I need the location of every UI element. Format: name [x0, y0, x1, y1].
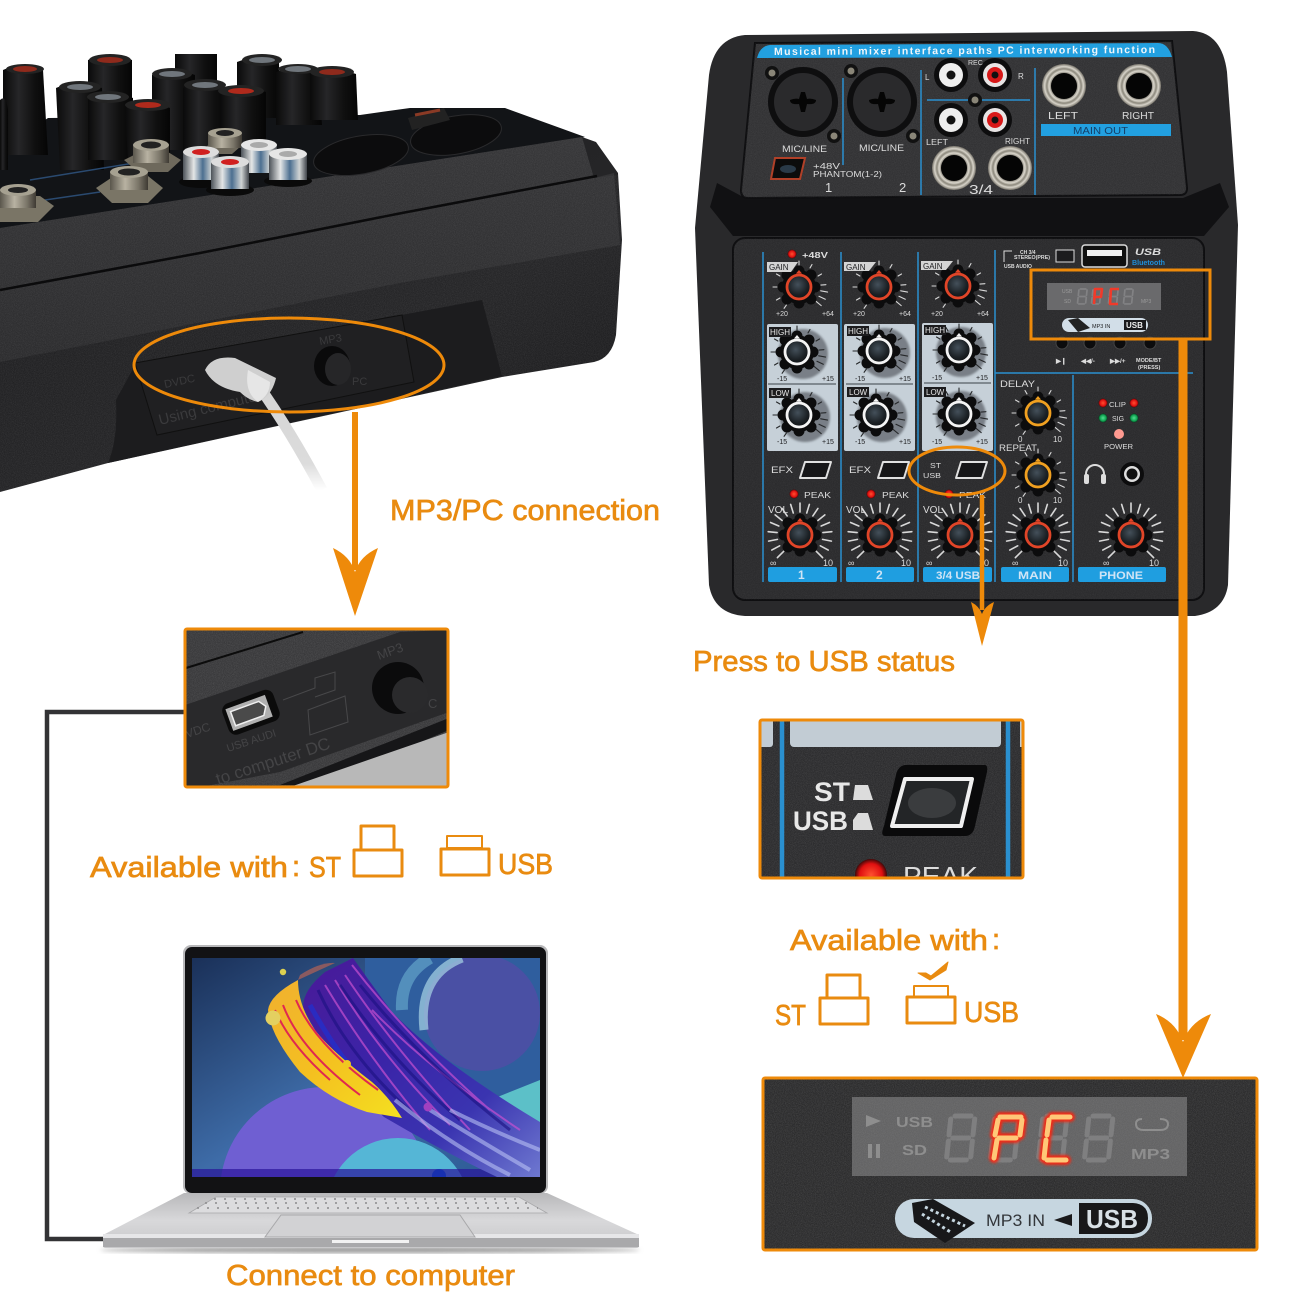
blue deck lines	[30, 158, 165, 200]
blue channel labels: MAIN	[1018, 570, 1052, 582]
channel labels on dark: +20	[853, 311, 865, 318]
transport buttons	[1055, 337, 1162, 371]
channel labels on dark: 10	[1053, 496, 1062, 505]
mixer deck top	[0, 108, 585, 230]
channel labels on dark: REPEAT	[999, 443, 1038, 453]
GAIN tags	[767, 261, 953, 272]
connector panel labels: RIGHT	[1005, 137, 1030, 146]
effect knobs	[1016, 392, 1060, 496]
HIGH LOW tags: LOW	[926, 388, 945, 397]
channel labels on dark: VOL	[846, 505, 866, 516]
channel labels on dark: ∞	[1012, 558, 1018, 568]
transport buttons: (PRESS)	[1138, 365, 1160, 371]
connector plate	[135, 315, 414, 435]
small indicator icons	[853, 785, 873, 830]
label: connect to computer: Connect to computer	[226, 1260, 515, 1292]
micro USB connector	[222, 690, 280, 735]
channel labels on dark: 0	[1018, 496, 1023, 505]
label: available with ST: :	[292, 851, 300, 883]
connector panel labels: 2	[899, 180, 906, 195]
MAIN OUT band	[1041, 124, 1171, 137]
label: USB left: USB	[498, 849, 553, 881]
EQ range legends	[777, 375, 988, 446]
USB port area: USB AUDIO	[1004, 264, 1032, 270]
EQ range legends: -15	[932, 439, 942, 446]
plate legends: MP3	[318, 332, 343, 348]
icon: USB switch down	[441, 836, 489, 875]
headphone output	[1084, 462, 1144, 486]
switch legends: ST	[930, 461, 941, 470]
label: press to USB status: Press to USB status	[693, 646, 955, 678]
channel labels on dark: 10	[979, 558, 989, 568]
HIGH LOW tags: HIGH	[848, 327, 868, 336]
EQ range legends: -15	[777, 376, 787, 383]
transport buttons: ▶▶/+	[1109, 358, 1126, 365]
bevel shadow	[710, 183, 1229, 236]
push button	[314, 346, 351, 386]
display icons and legends: USB	[896, 1114, 933, 1131]
embossed legends: to computer DC	[213, 734, 332, 789]
GAIN tags: GAIN	[846, 263, 866, 272]
GAIN tags: GAIN	[769, 263, 789, 272]
connector panel labels: L	[925, 73, 930, 82]
connector panel labels: 1	[825, 180, 832, 195]
transport buttons: ◀◀/-	[1080, 358, 1095, 365]
RCA sockets	[934, 58, 1012, 137]
channel labels on dark: EFX	[771, 465, 793, 475]
channel labels on dark: PEAK	[804, 491, 832, 500]
XLR combo jacks	[765, 64, 982, 143]
control panel texture	[733, 238, 1204, 600]
arrow: rear port to inset	[333, 412, 378, 616]
EFX and mode buttons	[800, 462, 987, 478]
plate legends: DVDC	[163, 373, 196, 391]
legends: ST	[814, 777, 851, 807]
light panel edges	[790, 722, 1001, 747]
embossed legends: MP3	[375, 640, 405, 663]
LEDs	[788, 250, 1138, 498]
channel labels on dark: ∞	[770, 558, 776, 568]
channel labels on dark: ∞	[848, 558, 854, 568]
icon: ST switch right	[820, 975, 868, 1024]
embossed legends: USB AUDI	[225, 728, 278, 755]
upper textured band	[0, 137, 620, 362]
recessed plate	[185, 630, 449, 790]
icon: ST switch up	[354, 826, 402, 876]
lid	[183, 945, 548, 1194]
EQ range legends: +15	[976, 375, 988, 382]
channel labels on dark: +48V	[802, 251, 829, 260]
HIGH LOW tags: LOW	[849, 388, 868, 397]
channel labels on dark: CLIP	[1109, 402, 1126, 409]
label: available with ST: Available with	[90, 852, 288, 884]
quarter-inch jacks	[932, 64, 1161, 190]
switch legends	[923, 461, 941, 480]
laptop base	[103, 1193, 639, 1248]
EQ range legends: +15	[976, 439, 988, 446]
lit digits PC	[994, 1117, 1070, 1160]
keyboard	[189, 1197, 547, 1213]
light corner	[290, 732, 449, 787]
mixer body	[695, 31, 1238, 616]
channel labels on dark: VOL	[923, 505, 943, 516]
pill legend	[895, 1199, 1152, 1243]
pill legend: MP3 IN	[986, 1211, 1045, 1230]
EQ range legends: -15	[855, 439, 865, 446]
connector panel labels: RIGHT	[1122, 111, 1154, 122]
EQ range legends: +15	[899, 376, 911, 383]
computer cable	[47, 712, 240, 1239]
channel labels on dark: VOL	[768, 505, 788, 516]
push button detail	[372, 662, 424, 714]
mixer side panel	[0, 137, 622, 492]
mixer top view	[695, 31, 1238, 616]
laptop	[101, 945, 639, 1254]
channel labels on dark: EFX	[849, 465, 871, 475]
EQ range legends: +15	[822, 439, 834, 446]
blue title band	[757, 43, 1172, 58]
photo: mixer rear close-up	[0, 54, 622, 492]
connector panel labels: 3/4	[969, 182, 993, 197]
label: available with right: :	[992, 924, 1000, 956]
display window	[852, 1097, 1187, 1176]
channel labels on dark: 0	[1018, 435, 1023, 444]
arrow: switch to label	[971, 495, 994, 646]
USB port area: USB	[1135, 247, 1162, 257]
HIGH LOW tags: LOW	[771, 389, 790, 398]
display icons and legends: SD	[902, 1142, 927, 1159]
pill legend: USB	[1086, 1204, 1138, 1234]
channel labels on dark: +20	[931, 311, 943, 318]
white USB cable	[205, 358, 322, 490]
crease line	[0, 176, 597, 290]
USB port area: Bluetooth	[1132, 260, 1165, 267]
switch legends: USB	[923, 471, 941, 480]
rocker button	[882, 765, 987, 836]
connector panel	[741, 41, 1187, 198]
channel labels on dark: 10	[901, 558, 911, 568]
transport buttons: ▶❙	[1055, 357, 1066, 365]
EQ light panels	[767, 323, 993, 451]
LED display	[1047, 283, 1161, 310]
EQ knobs	[776, 328, 980, 436]
HIGH LOW tags: HIGH	[925, 326, 945, 335]
embossed legends	[184, 640, 437, 789]
phantom switch	[771, 158, 805, 179]
jacks on deck	[0, 108, 505, 222]
channel labels on dark: POWER	[1104, 444, 1133, 451]
orange frame	[760, 720, 1023, 878]
channel labels on dark: SIG	[1112, 416, 1124, 423]
channel labels on dark: ∞	[926, 558, 932, 568]
inset: USB port detail	[184, 629, 449, 790]
LED display: SD	[1064, 299, 1071, 305]
icon: USB switch selected	[907, 962, 955, 1023]
LED display: MP3	[1141, 299, 1152, 305]
legends: USB	[793, 806, 848, 836]
plate legends	[157, 332, 367, 429]
label: MP3/PC connection: MP3/PC connection	[390, 495, 660, 527]
blue channel labels	[768, 567, 1166, 582]
screen artwork	[192, 958, 540, 1177]
connector panel labels: LEFT	[1048, 111, 1078, 122]
channel labels on dark: DELAY	[1000, 379, 1035, 389]
channel labels on dark	[768, 251, 1159, 568]
inset: USB switch detail: PEAK	[903, 861, 979, 891]
LED display: USB	[1062, 289, 1073, 295]
channel labels on dark: 10	[1053, 435, 1062, 444]
connector panel labels: MIC/LINE	[859, 143, 904, 153]
EQ knob scales	[771, 324, 988, 436]
gain and volume knobs	[778, 264, 1152, 556]
connector panel labels: R	[1018, 72, 1024, 81]
channel labels on dark: 10	[1149, 558, 1159, 568]
connector panel labels: REC	[968, 60, 983, 67]
display icons and legends	[866, 1115, 1170, 1159]
channel labels on dark: PEAK	[882, 491, 910, 500]
connector panel labels: MIC/LINE	[782, 144, 827, 154]
HIGH LOW tags: HIGH	[770, 328, 790, 337]
connector panel texture	[741, 41, 1187, 198]
EQ range legends: +15	[822, 376, 834, 383]
MP3 IN USB pill: USB	[1126, 321, 1143, 330]
channel dividers	[763, 250, 1193, 582]
control panel	[733, 238, 1204, 600]
laptop shadow	[100, 1247, 640, 1253]
embossed legends: C	[428, 696, 437, 711]
MP3 IN USB pill: MP3 IN	[1092, 324, 1110, 330]
channel labels on dark: +20	[776, 311, 788, 318]
blue rails	[782, 720, 1008, 878]
USB port area: CH 3/4	[1020, 250, 1036, 256]
channel labels on dark: 10	[823, 558, 833, 568]
channel labels on dark: +64	[822, 311, 834, 318]
knob scales	[768, 260, 1163, 558]
highlight: switch ellipse	[909, 447, 1005, 495]
inset: PC display detail	[763, 1078, 1257, 1250]
label: USB right: USB	[964, 997, 1019, 1029]
HIGH LOW tags	[769, 325, 946, 398]
label: ST right: ST	[775, 1000, 806, 1032]
display icons and legends: MP3	[1131, 1146, 1170, 1163]
blue channel labels: PHONE	[1099, 570, 1143, 582]
channel labels on dark: +64	[899, 311, 911, 318]
orange frame	[185, 629, 448, 787]
highlight ellipse	[134, 318, 444, 412]
channel labels on dark: 10	[1058, 558, 1068, 568]
inset: USB switch detail	[758, 716, 1025, 891]
connector dividers	[843, 68, 1035, 195]
blue channel labels: 3/4 USB	[936, 570, 980, 582]
EQ range legends: -15	[855, 376, 865, 383]
label: available with ST	[90, 851, 341, 884]
EQ range legends: +15	[899, 439, 911, 446]
plate legends: PC	[352, 376, 367, 388]
connector recess	[108, 300, 502, 463]
label: available with ST: ST	[309, 852, 341, 884]
trackpad	[265, 1215, 475, 1237]
channel labels on dark: +64	[977, 311, 989, 318]
connector panel labels	[782, 60, 1154, 197]
transport buttons: MODE/BT	[1136, 358, 1162, 364]
channel labels on dark: PEAK	[959, 491, 987, 500]
channel labels on dark: ∞	[1103, 558, 1109, 568]
orange frame	[763, 1078, 1257, 1250]
highlight: display box	[1031, 270, 1210, 339]
group of tall knobs	[0, 54, 358, 170]
band text: Musical mini mixer interface paths PC interworking function	[774, 44, 1155, 58]
plate legends: Using computer	[157, 387, 263, 429]
textured housing	[185, 629, 448, 787]
embossed legends: VDC	[184, 720, 212, 741]
USB port area	[1004, 245, 1165, 270]
EQ range legends: -15	[932, 375, 942, 382]
connector panel labels: +48V	[813, 162, 841, 171]
connector panel labels: PHANTOM(1-2)	[813, 170, 882, 179]
label: available with right: Available with	[790, 925, 988, 957]
dim seven segment digits	[946, 1116, 1113, 1160]
legends	[794, 782, 850, 830]
GAIN tags: GAIN	[923, 262, 943, 271]
notch	[332, 1240, 409, 1243]
arrow: display to inset	[1156, 339, 1211, 1078]
peak LED	[855, 859, 887, 876]
EQ knob shading	[778, 327, 986, 442]
EQ range legends: -15	[777, 439, 787, 446]
MP3 IN USB pill	[1062, 318, 1148, 332]
blue channel labels: 1	[798, 568, 805, 582]
blue channel labels: 2	[876, 568, 883, 582]
USB port area: STEREO(PRE)	[1014, 255, 1050, 261]
connector panel labels: LEFT	[926, 138, 948, 147]
MAIN OUT band: MAIN OUT	[1073, 126, 1128, 137]
